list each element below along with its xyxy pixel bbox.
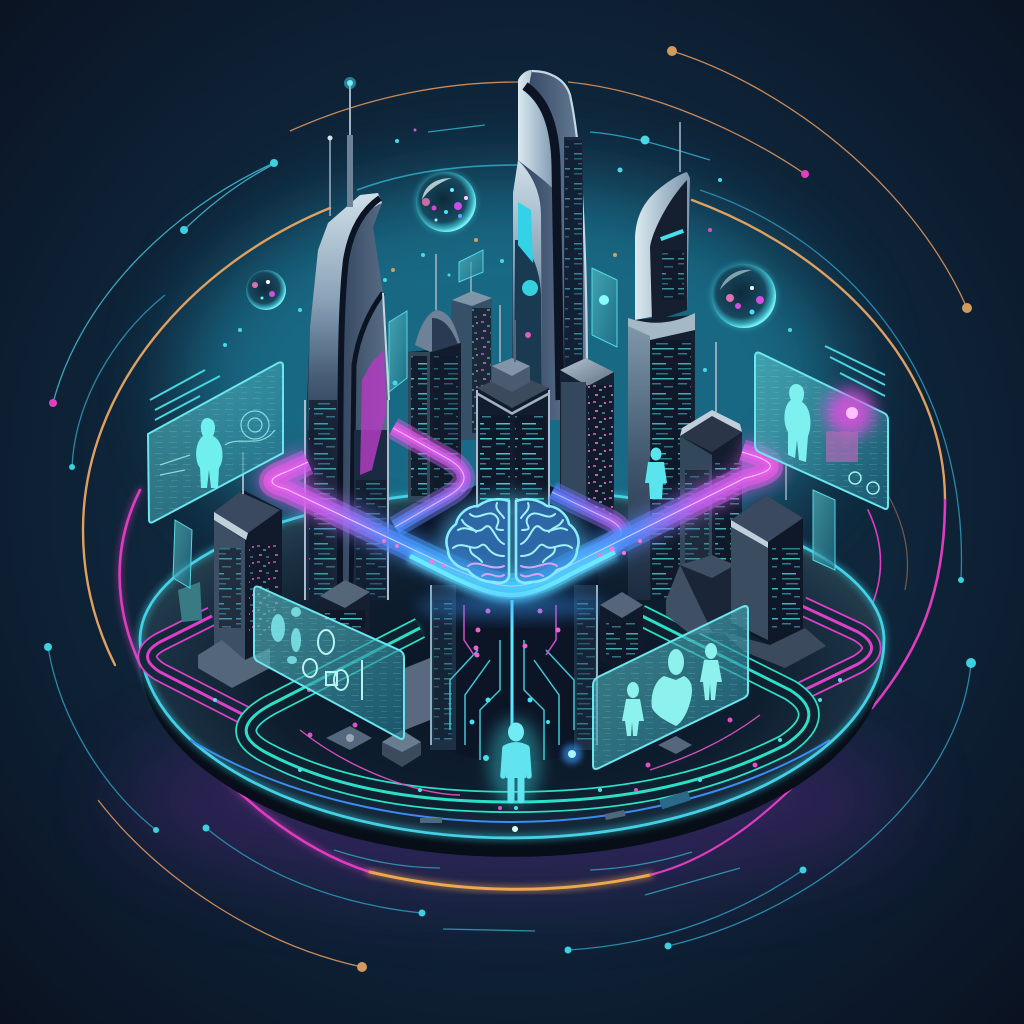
icon: glowing brain (438, 494, 586, 586)
platform scattered lights (213, 658, 842, 832)
light points along the road (382, 539, 642, 568)
person: small figure at right tower (645, 448, 667, 499)
tower: centre front (476, 305, 550, 515)
platform (140, 490, 884, 857)
central circuit cylinder (430, 570, 598, 762)
tower: left front block (198, 452, 282, 688)
floating particles (223, 128, 792, 386)
small side panels (173, 490, 835, 588)
tower: centre-right (560, 358, 614, 530)
platform circuit tracks (148, 606, 872, 822)
bubble orb: right (711, 263, 777, 329)
tower: right front block (722, 465, 826, 668)
tower: centre tall (512, 70, 587, 420)
holo panel: lower right (593, 606, 748, 769)
tower: right tall (628, 122, 695, 600)
background teal glow behind towers (182, 180, 842, 580)
small blocks on platform (178, 580, 692, 767)
bubble orb: centre left (415, 171, 477, 233)
tower: left tall (305, 77, 389, 600)
tower: small centre-left spire (408, 254, 461, 520)
central dark plaza inside road loop (392, 470, 628, 590)
small rear holo panels (389, 250, 617, 392)
cyan glow beneath road corner (417, 594, 607, 618)
holo panel: upper right (755, 346, 888, 509)
glowing road loop (272, 428, 770, 595)
person: glowing figure in front of cylinder (489, 718, 541, 806)
bubble orb: left (246, 270, 286, 310)
holo panel: lower left (254, 586, 404, 739)
holo panel: upper left (148, 362, 283, 523)
glowing orange and pink outer rings (83, 200, 945, 889)
purple glow under platform (122, 710, 902, 890)
tower: far small centre-left (451, 262, 492, 440)
circuit traces (450, 600, 574, 760)
orb: glowing node right of person (562, 744, 582, 764)
tower: right middle block (666, 342, 742, 634)
